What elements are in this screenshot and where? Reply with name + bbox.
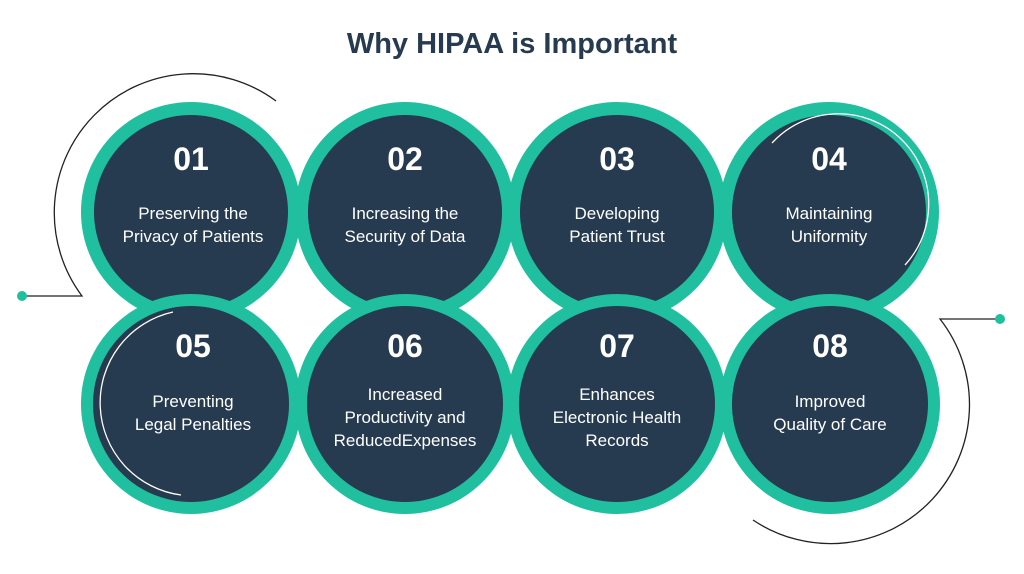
circle 08: Quality of Care — [773, 415, 887, 434]
circle 07: Enhances — [579, 385, 655, 404]
circle 02: Increasing the — [352, 204, 458, 223]
circle 02: Security of Data — [345, 227, 466, 246]
circle 04: Maintaining — [786, 204, 872, 223]
circle 05 — [81, 294, 301, 514]
circle 07: Electronic Health — [553, 408, 681, 427]
circle 08: 08 — [812, 328, 848, 364]
arrow: left connector arc — [17, 74, 276, 301]
circle 07 — [507, 294, 727, 514]
circle 02 — [295, 102, 515, 322]
title: Why HIPAA is Important — [347, 28, 677, 60]
circle 01: Preserving the — [138, 204, 248, 223]
circle 04: 04 — [811, 141, 847, 177]
circle 04: Uniformity — [791, 227, 868, 246]
circle 02: 02 — [387, 141, 423, 177]
arrow: right connector arc — [753, 314, 1005, 544]
circle 06: Increased — [368, 385, 442, 404]
circle 06: Productivity and — [345, 408, 465, 427]
circle 05: Preventing — [152, 392, 234, 411]
circle 07: Records — [585, 431, 649, 450]
circle 01: Privacy of Patients — [123, 227, 263, 246]
circle 03: Patient Trust — [569, 227, 665, 246]
circle 05: Legal Penalties — [135, 415, 251, 434]
circle 01 — [81, 102, 301, 322]
circle 04 — [719, 102, 939, 322]
circle 06: 06 — [387, 328, 423, 364]
circle 01: 01 — [173, 141, 209, 177]
circle 08: Improved — [795, 392, 865, 411]
circle 06 — [295, 294, 515, 514]
circle 05: 05 — [175, 328, 211, 364]
circle 03 — [507, 102, 727, 322]
circle 07: 07 — [599, 328, 635, 364]
circle 03: Developing — [574, 204, 660, 223]
circle 08 — [720, 294, 940, 514]
circle 03: 03 — [599, 141, 635, 177]
circle 06: ReducedExpenses — [334, 431, 476, 450]
